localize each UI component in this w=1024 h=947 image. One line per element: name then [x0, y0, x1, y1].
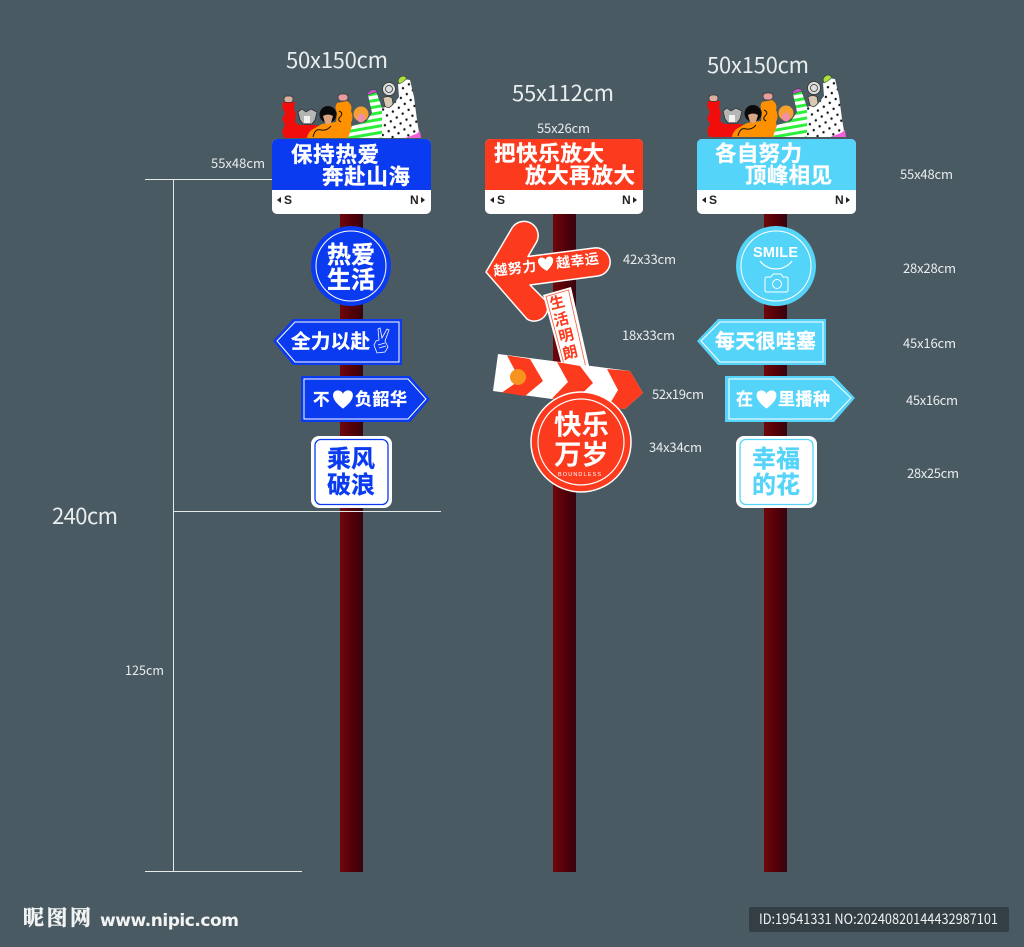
panel: left round sign: 热爱 — [327, 242, 375, 269]
panel: left right-arrow sign — [301, 376, 430, 422]
icon: smile curve — [760, 261, 792, 269]
panel: right column right-arrow sign: 里播种 — [778, 390, 830, 409]
label: banner size: 18x33cm — [622, 325, 675, 344]
panel: red round sign — [531, 392, 631, 492]
panel: red arrow sign — [486, 221, 610, 321]
panel: middle top sign: 放大再放大 — [525, 164, 635, 188]
icon: heart — [538, 256, 554, 272]
panel: right column right-arrow sign: 在 — [736, 390, 753, 409]
label: middle overall size: 55x112cm — [512, 76, 614, 108]
label: right overall size: 50x150cm — [707, 48, 809, 80]
panel: left square sign: 破浪 — [327, 472, 375, 499]
label: middle top sign size: 55x26cm — [537, 118, 590, 137]
icon: orange dot — [510, 369, 526, 385]
panel: left round sign — [311, 226, 391, 306]
panel: vertical banner: 朗 — [561, 343, 580, 363]
panel: left right-arrow sign: 负韶华 — [355, 390, 407, 409]
panel: right column square sign: 的花 — [752, 472, 800, 499]
panel: left square sign: 乘风 — [327, 446, 375, 473]
label: left overall size: 50x150cm — [286, 43, 388, 75]
panel: middle top sign: N — [622, 193, 631, 207]
panel: middle top sign — [485, 139, 643, 214]
watermark id box: ID:19541331 NO:20240820144432987101 — [759, 909, 998, 929]
panel: vertical banner: 生 — [548, 293, 567, 313]
panel: right column square sign: 幸福 — [752, 446, 800, 473]
panel: vertical banner: 明 — [557, 326, 576, 346]
panel: right top sign: 顶峰相见 — [745, 164, 832, 188]
panel: right column square sign — [736, 436, 817, 508]
panel: right top sign: S — [709, 193, 717, 207]
poles — [340, 214, 787, 872]
panel: right top sign: N — [835, 193, 844, 207]
panel: right column left-arrow sign: 每天很哇塞 — [715, 329, 816, 353]
panel: vertical banner — [543, 287, 590, 370]
label: lower height: 125cm — [125, 660, 164, 679]
panel: vertical banner: 活 — [552, 310, 571, 330]
panel: middle top sign: S — [497, 193, 505, 207]
panel: left top sign — [272, 139, 431, 214]
panel: right top sign: 各自努力 — [715, 142, 802, 166]
panel: chevron board — [493, 354, 643, 409]
label: total height: 240cm — [52, 499, 118, 531]
panel: left arrow sign: 全力以赴 — [291, 330, 370, 353]
label: square sign size: 28x25cm — [907, 463, 959, 482]
panel: left top sign: 奔赴山海 — [322, 165, 410, 189]
label: right top sign size: 55x48cm — [900, 164, 953, 183]
panel: left round sign: 生活 — [327, 267, 375, 294]
label: right arrow size: 45x16cm — [906, 390, 958, 409]
panel: left top sign: S — [284, 193, 292, 207]
watermark logo: www.nipic.com — [100, 911, 239, 931]
panel: left arrow sign — [273, 319, 402, 365]
watermark logo — [23, 902, 239, 932]
panel: red round sign: 快乐 — [554, 409, 609, 440]
label: left top sign size: 55x48cm — [211, 153, 265, 172]
panel: smile round sign — [736, 226, 816, 306]
illustration: left crowd — [282, 76, 421, 138]
label: chevron size: 52x19cm — [652, 384, 704, 403]
label: smile sign size: 28x28cm — [903, 258, 956, 277]
icon: heart — [757, 390, 776, 409]
panel: red arrow sign: 越努力 — [492, 258, 537, 279]
panel: smile round sign: SMILE — [753, 245, 798, 261]
label: arrow size: 42x33cm — [623, 249, 676, 268]
panel: red arrow sign: 越幸运 — [555, 250, 600, 271]
panel: left top sign: N — [410, 193, 419, 207]
panel: middle top sign: 把快乐放大 — [494, 142, 604, 166]
label: round sign size: 34x34cm — [649, 437, 702, 456]
panel: right column left-arrow sign — [697, 319, 826, 365]
panel: red round sign: 万岁 — [554, 439, 609, 470]
panel: right top sign — [697, 139, 856, 214]
dimension lines — [145, 179, 441, 872]
icon: victory hand — [374, 328, 389, 353]
panel: left top sign: 保持热爱 — [291, 143, 379, 167]
panel: red round sign: BOUNDLESS — [558, 472, 601, 478]
panel: right column right-arrow sign — [725, 376, 855, 422]
panel: left right-arrow sign: 不 — [313, 391, 330, 409]
icon: heart — [333, 390, 353, 409]
panel: left square sign — [311, 436, 392, 508]
illustration: right crowd — [707, 75, 846, 137]
icon: camera — [765, 274, 788, 292]
label: left arrow size: 45x16cm — [903, 333, 956, 352]
watermark logo: 昵图网 — [23, 902, 91, 932]
